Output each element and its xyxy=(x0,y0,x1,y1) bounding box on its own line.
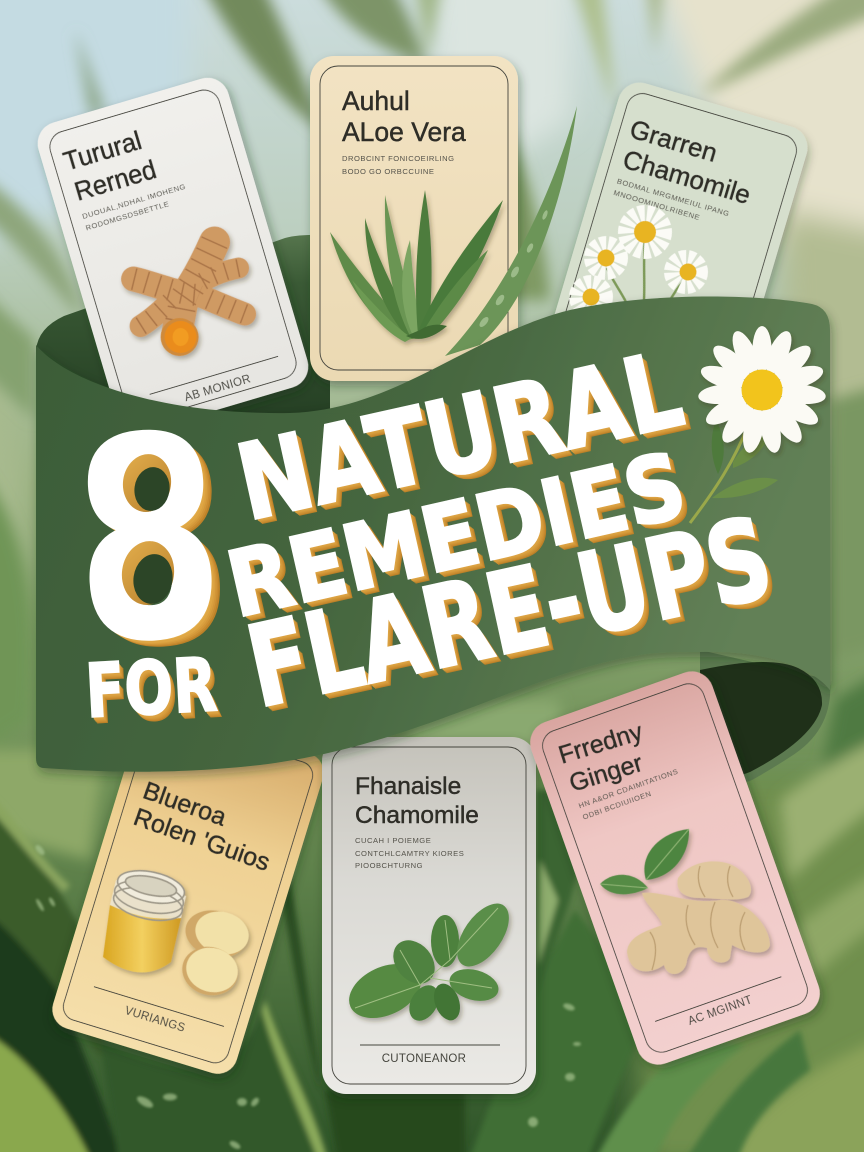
line: NATURAL: NATURAL xyxy=(227,328,692,544)
card heading: Frredny xyxy=(555,717,646,770)
divider xyxy=(360,1044,500,1046)
card: aloe vera xyxy=(310,56,518,381)
flower head xyxy=(697,326,827,455)
title: 8 Natural Remedies for Flare-Ups xyxy=(68,328,783,735)
card footer: CUTONEANOR xyxy=(382,1053,466,1065)
card: chamomile top right xyxy=(522,76,813,463)
card description: CUCAH I POIEMGE xyxy=(355,836,431,845)
divider xyxy=(655,977,781,1021)
card heading: Blueroa xyxy=(139,777,230,832)
icon: honey jar with ginger slices xyxy=(103,865,254,1001)
card description: DUOUAL,NDHAL IMOHENG xyxy=(81,182,187,221)
card description: CONTCHLCAMTRY KIORES xyxy=(355,849,464,858)
card footer: VURIANGS xyxy=(123,1005,187,1035)
icon: chamomile flowers xyxy=(578,216,699,310)
card heading: Turural xyxy=(60,127,145,176)
daisy centre xyxy=(742,370,782,410)
icon: green leaves xyxy=(340,895,519,1029)
card heading: Rerned xyxy=(71,156,160,207)
card description: DROBCINT FONICOEIRLING xyxy=(342,154,455,163)
numeral 8 counters xyxy=(122,454,174,605)
card description: BODO GO ORBCCUINE xyxy=(342,167,434,176)
card heading: Fhanaisle xyxy=(355,773,461,800)
card description: MNOOOMINOLRIBENE xyxy=(612,188,701,222)
card description: BODMAL MRGMMEIUL IPANG xyxy=(616,177,731,218)
divider xyxy=(150,356,278,394)
banner: front ribbon xyxy=(36,296,830,772)
card heading: ALoe Vera xyxy=(342,117,466,147)
card heading: Auhul xyxy=(342,86,410,116)
divider xyxy=(94,987,224,1026)
line: FOR: FOR xyxy=(83,642,219,735)
card: ginger xyxy=(515,663,832,1074)
card: leafy chamomile xyxy=(322,737,536,1094)
icon: turmeric root xyxy=(134,242,245,356)
card: turmeric xyxy=(32,73,314,437)
card description: ODBI BCDIUIIOEN xyxy=(581,789,653,822)
tall aloe leaf xyxy=(445,106,577,356)
banner: back inner loop right xyxy=(700,650,830,800)
card description: HN A&OR CDAIMITATIONS xyxy=(577,767,679,810)
card description: PIOOBCHTURNG xyxy=(355,861,423,870)
card footer: AC MGINNT xyxy=(687,994,754,1028)
numeral 8: 8 xyxy=(68,377,230,704)
card heading: Rolen 'Guios xyxy=(130,803,274,877)
stem and leaves xyxy=(690,420,778,523)
line: REMEDIES: REMEDIES xyxy=(218,433,695,638)
card heading: Chamomile xyxy=(620,144,754,210)
card heading: Grarren xyxy=(626,114,721,168)
card heading: Ginger xyxy=(566,749,646,798)
card description: RODOMGSDSBETTLE xyxy=(85,199,170,232)
decorative daisy with stem xyxy=(690,326,827,523)
card heading: Chamomile xyxy=(355,802,479,829)
banner: back inner loop left xyxy=(36,235,330,430)
line: FLARE-UPS: FLARE-UPS xyxy=(237,493,783,733)
card footer: AB MONIOR xyxy=(183,373,252,404)
card: honey and ginger xyxy=(47,703,329,1079)
icon: aloe plant xyxy=(330,190,503,342)
icon: ginger root with leaves xyxy=(600,829,770,974)
